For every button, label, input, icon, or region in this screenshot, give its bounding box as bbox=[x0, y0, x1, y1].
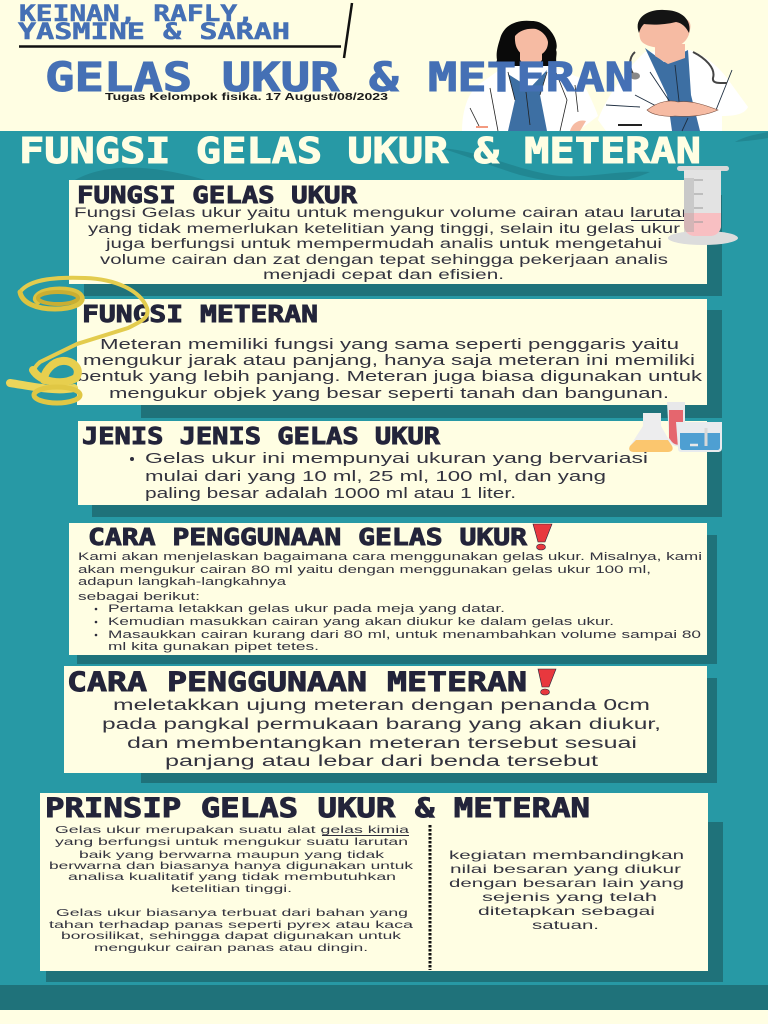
body text: fungsi gelas ukur: juga berfungsi untuk mempermudah analis untuk mengetahui bbox=[104, 236, 662, 251]
body text: fungsi gelas ukur: yang tidak memerlukan ketelitian yang tinggi, selain itu gelas ukur bbox=[88, 221, 681, 236]
body text: cara penggunaan gelas ukur: Pertama letakkan gelas ukur pada meja yang datar. bbox=[108, 603, 505, 615]
body text: cara penggunaan meteran: dan membentangkan meteran tersebut sesuai bbox=[127, 735, 637, 752]
body text: meteran column: nilai besaran yang diukur bbox=[450, 862, 681, 876]
body text: cara penggunaan gelas ukur: adapun langkah-langkahnya bbox=[78, 576, 286, 588]
body text: cara penggunaan meteran: meletakkan ujung meteran dengan penanda 0cm bbox=[113, 697, 650, 714]
icon: measuring cylinder bbox=[668, 166, 738, 245]
body text: gelas ukur column: tahan terhadap panas seperti pyrex atau kaca bbox=[49, 919, 413, 931]
heading: jenis jenis gelas ukur: JENIS JENIS GELAS UKUR bbox=[82, 424, 440, 450]
panel: jenis jenis gelas ukur bbox=[78, 421, 722, 517]
panel: fungsi meteran bbox=[77, 299, 722, 418]
body text: cara penggunaan gelas ukur: Masaukkan cairan kurang dari 80 ml, untuk menambahkan volume sampai 80 bbox=[108, 629, 701, 641]
heading: fungsi meteran: FUNGSI METERAN bbox=[82, 302, 318, 328]
illustration: female doctor bbox=[462, 21, 598, 131]
heading: prinsip: PRINSIP GELAS UKUR & METERAN bbox=[45, 793, 590, 824]
bullet text: jenis gelas ukur: Gelas ukur ini mempunyai ukuran yang bervariasi bbox=[145, 450, 648, 467]
body text: fungsi meteran: bentuk yang lebih panjang. Meteran juga biasa digunakan untuk bbox=[77, 369, 703, 385]
body text: fungsi meteran: mengukur objek yang besar seperti tanah dan bangunan. bbox=[109, 386, 669, 402]
panel: prinsip gelas ukur dan meteran bbox=[40, 793, 723, 982]
subtitle: Tugas Kelompok fisika. 17 August/08/2023 bbox=[105, 92, 389, 103]
heading: cara penggunaan gelas ukur: CARA PENGGUNAAN GELAS UKUR bbox=[88, 525, 527, 551]
body text: cara penggunaan gelas ukur: akan mengukur cairan 80 ml yaitu dengan menggunakan gelas ukur 100 ml, bbox=[78, 564, 651, 576]
body text: gelas ukur column: analisa kualitatif yang tidak membutuhkan bbox=[68, 871, 396, 883]
body text: cara penggunaan gelas ukur: sebagai berikut: bbox=[78, 591, 200, 603]
body text: gelas ukur column: baik yang berwarna maupun yang tidak bbox=[79, 849, 385, 861]
body text: cara penggunaan gelas ukur: Kami akan menjelaskan bagaimana cara menggunakan gelas ukur. Misalnya, kami bbox=[78, 551, 702, 563]
body text: fungsi gelas ukur: volume cairan dan zat dengan tepat sehingga pekerjaan analis bbox=[100, 252, 668, 267]
body text: cara penggunaan meteran bbox=[102, 697, 661, 770]
body text: cara penggunaan gelas ukur: Kemudian masukkan cairan yang akan diukur ke dalam gelas ukur. bbox=[108, 616, 614, 628]
illustration: male doctor bbox=[598, 10, 748, 131]
body text: meteran column: kegiatan membandingkan bbox=[449, 848, 684, 862]
body text: fungsi gelas ukur: menjadi cepat dan efisien. bbox=[263, 267, 504, 282]
icon: exclamation mark bbox=[538, 669, 556, 695]
icon: lab glassware bbox=[629, 402, 722, 452]
panel: cara penggunaan gelas ukur bbox=[69, 523, 717, 664]
body text: fungsi meteran: Meteran memiliki fungsi yang sama seperti penggaris yaitu bbox=[100, 337, 679, 353]
header author names: YASMINE & SARAH bbox=[18, 20, 290, 45]
body text: gelas ukur column: berwarna dan biasanya hanya digunakan untuk bbox=[49, 860, 414, 872]
section heading: FUNGSI GELAS UKUR & METERAN bbox=[19, 131, 701, 172]
header author names: KEINAN, RAFLY, bbox=[19, 2, 254, 27]
body text: cara penggunaan gelas ukur bbox=[78, 551, 702, 653]
panel: cara penggunaan meteran bbox=[64, 666, 717, 783]
body text: gelas ukur column bbox=[49, 824, 414, 954]
main title: GELAS UKUR & METERAN bbox=[45, 55, 634, 101]
body text: cara penggunaan gelas ukur: ml kita gunakan pipet tetes. bbox=[108, 641, 319, 653]
body text: gelas ukur column: Gelas ukur biasanya terbuat dari bahan yang bbox=[56, 907, 408, 919]
body text: meteran column: ditetapkan sebagai bbox=[478, 904, 655, 918]
body text: fungsi gelas ukur bbox=[74, 205, 694, 282]
bullet text: jenis gelas ukur: mulai dari yang 10 ml, 25 ml, 100 ml, dan yang bbox=[145, 468, 606, 485]
bullet text: jenis gelas ukur: paling besar adalah 1000 ml atau 1 liter. bbox=[145, 485, 516, 502]
body text: gelas ukur column: borosilikat, sehingga dapat digunakan untuk bbox=[61, 930, 402, 942]
heading: cara penggunaan meteran: CARA PENGGUNAAN METERAN bbox=[67, 667, 527, 698]
icon: measuring tape bbox=[10, 278, 148, 403]
bullet text: jenis gelas ukur bbox=[130, 450, 648, 502]
panel: fungsi gelas ukur bbox=[69, 180, 722, 296]
body text: fungsi meteran bbox=[77, 337, 703, 402]
body text: gelas ukur column: Gelas ukur merupakan suatu alat gelas kimia bbox=[55, 824, 409, 836]
icon: exclamation mark bbox=[533, 524, 552, 550]
header author names bbox=[18, 2, 290, 45]
body text: fungsi meteran: mengukur jarak atau panjang, hanya saja meteran ini memiliki bbox=[83, 353, 695, 369]
body text: meteran column: sejenis yang telah bbox=[482, 890, 657, 904]
body text: fungsi gelas ukur: Fungsi Gelas ukur yaitu untuk mengukur volume cairan atau larutan bbox=[74, 205, 693, 220]
body text: meteran column: dengan besaran lain yang bbox=[449, 876, 684, 890]
body text: meteran column: satuan. bbox=[532, 918, 599, 932]
body text: meteran column bbox=[449, 848, 684, 932]
body text: gelas ukur column: yang berfungsi untuk mengukur suatu larutan bbox=[55, 836, 408, 848]
body text: cara penggunaan meteran: panjang atau lebar dari benda tersebut bbox=[165, 753, 599, 770]
body text: cara penggunaan meteran: pada pangkal permukaan barang yang akan diukur, bbox=[102, 716, 661, 733]
heading: fungsi gelas ukur: FUNGSI GELAS UKUR bbox=[77, 183, 357, 209]
body text: gelas ukur column: ketelitian tinggi. bbox=[171, 883, 292, 895]
header corner rule bbox=[19, 3, 352, 58]
body text: gelas ukur column: mengukur cairan panas atau dingin. bbox=[94, 942, 368, 954]
